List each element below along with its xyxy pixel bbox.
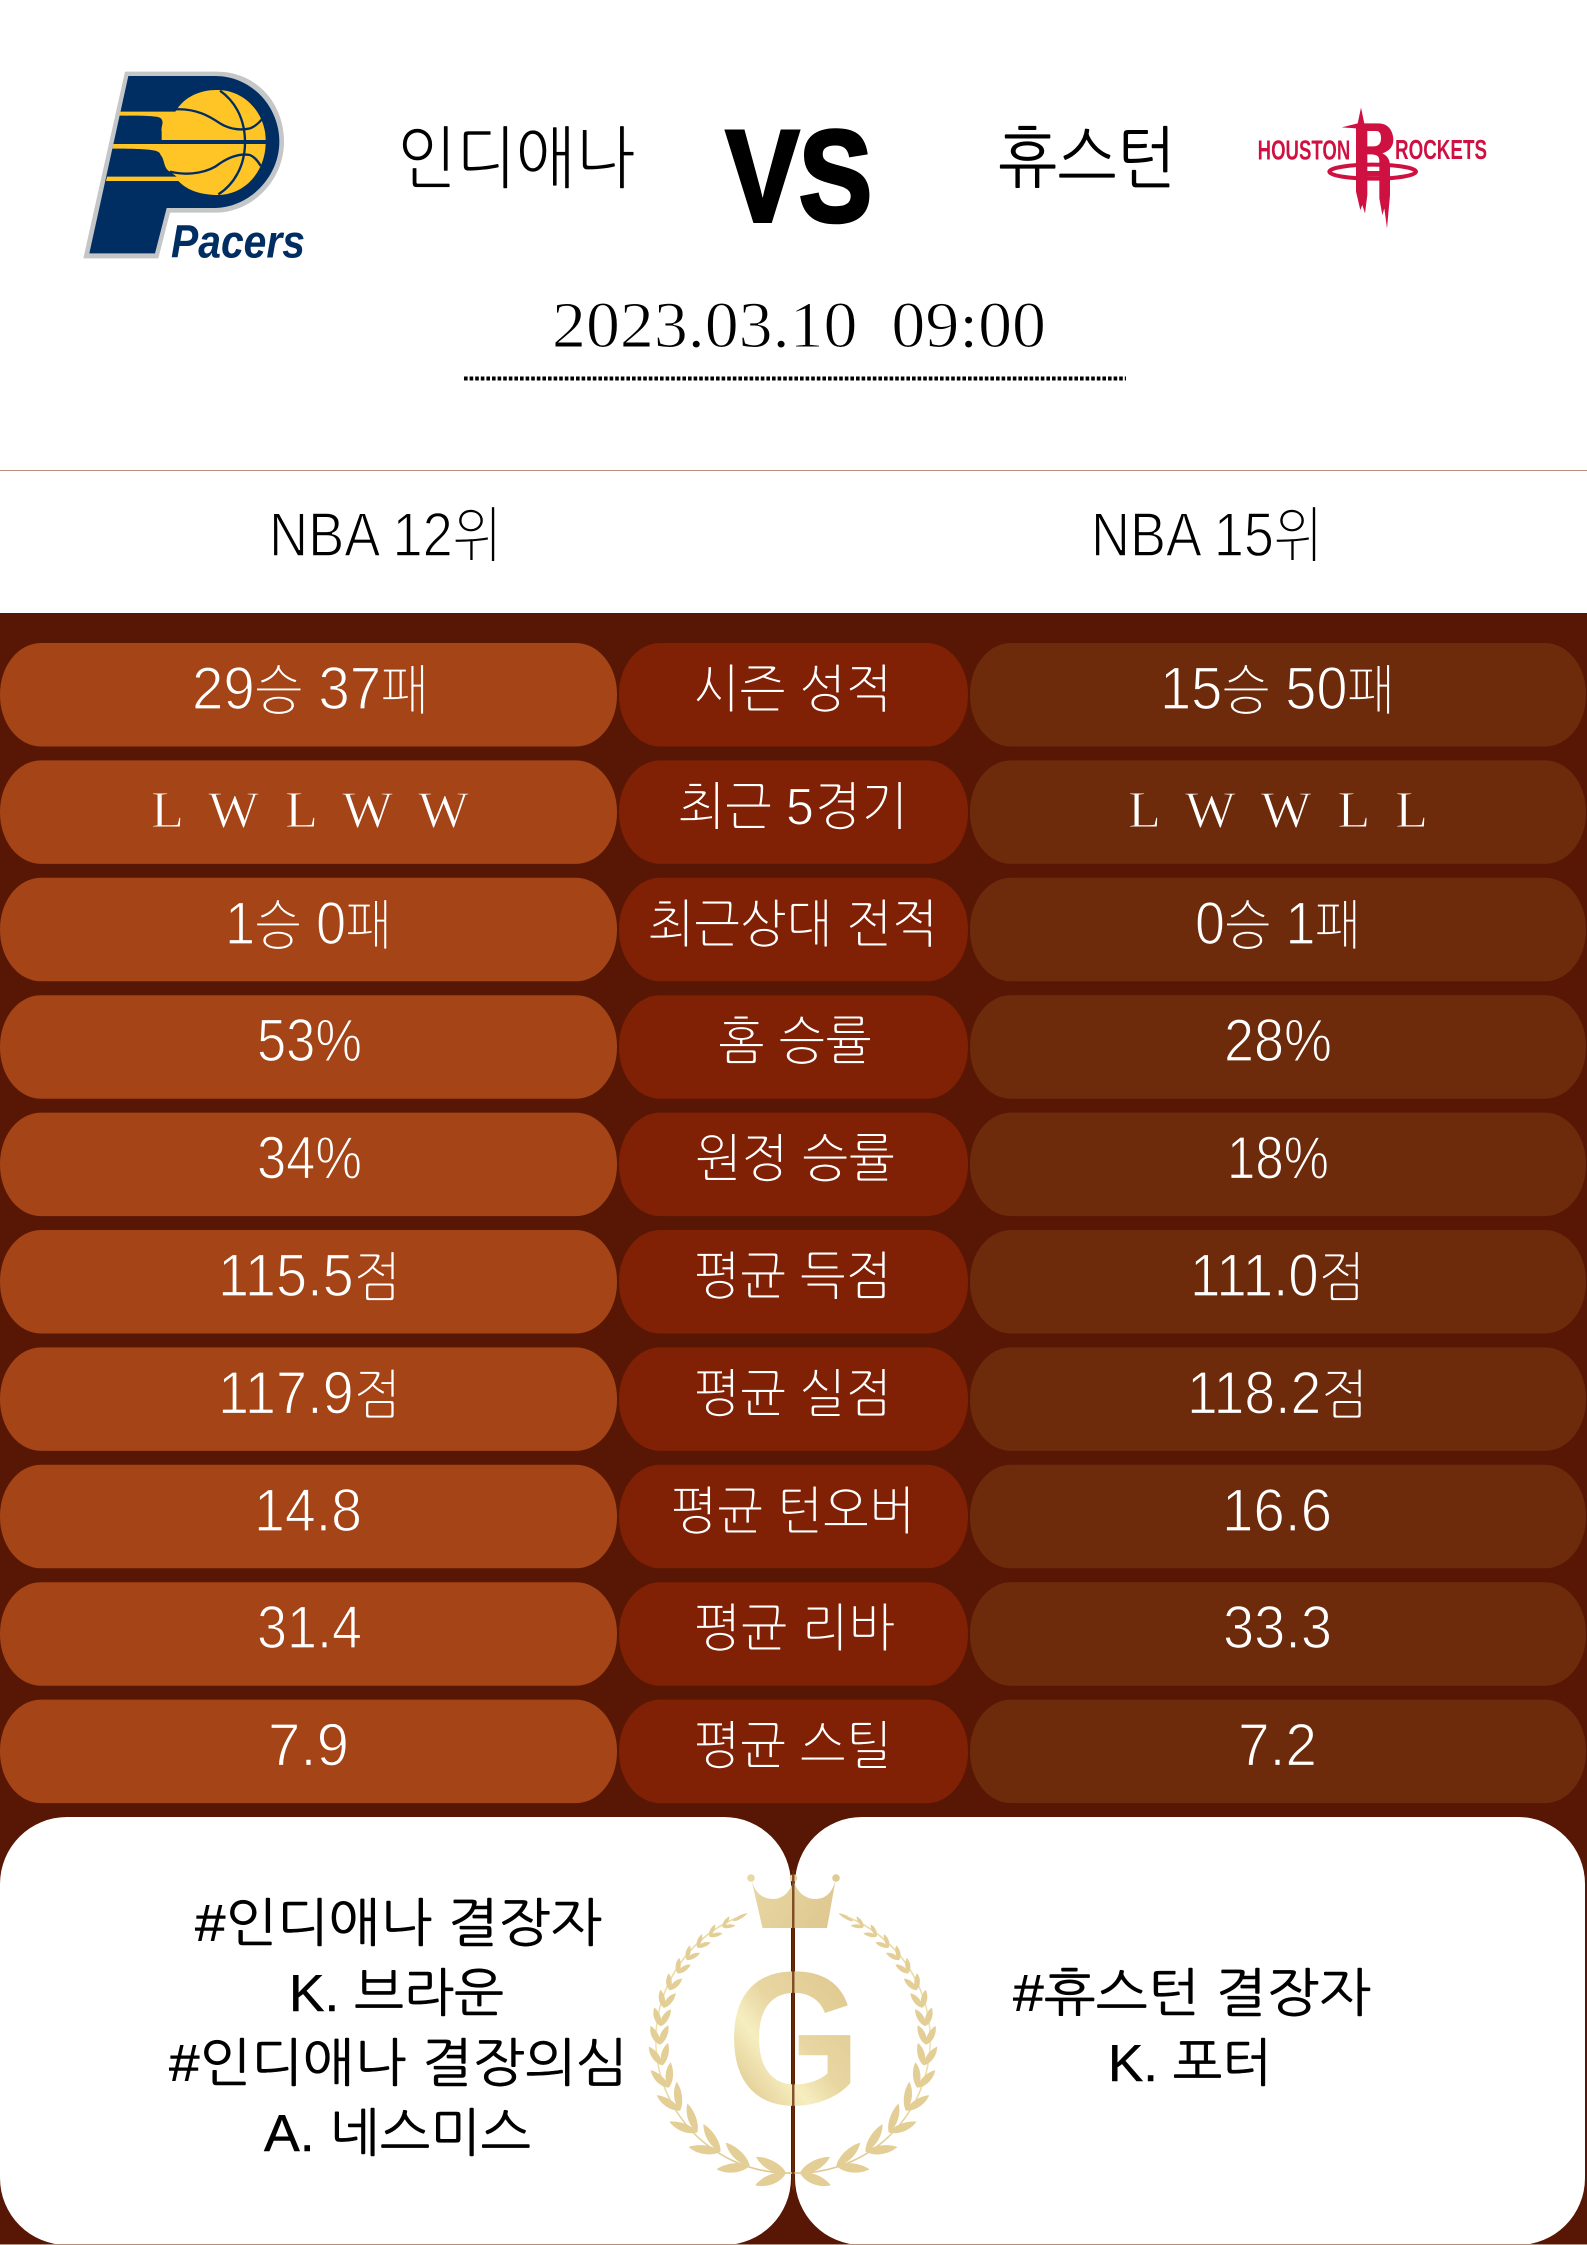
heading: VS: VS — [726, 103, 872, 249]
row: average points scored: 111.0점 — [1190, 1242, 1365, 1309]
row: last five games: 최근 5경기 — [678, 778, 908, 836]
text: Houston absent heading: #휴스턴 결장자 — [1013, 1965, 1371, 2023]
panel: dark background — [0, 613, 1587, 2245]
row: average steals: 7.9 — [268, 1712, 349, 1779]
row: last five games — [0, 760, 1586, 864]
heading: Indiana: 인디애나 — [397, 121, 635, 197]
date and time: 2023.03.10 09:00 — [552, 289, 1046, 362]
row: home win rate: 28% — [1224, 1007, 1332, 1074]
row: away win rate — [0, 1113, 1586, 1216]
row: average points allowed — [0, 1347, 1586, 1451]
row: away win rate: 34% — [257, 1125, 362, 1192]
league rank: Houston: NBA 15위 — [1091, 501, 1323, 570]
text: K. Porter: K. 포터 — [1108, 2035, 1272, 2093]
row: average points scored: 평균 득점 — [694, 1248, 892, 1306]
icon: Houston Rockets logo: HOUSTON — [1258, 135, 1350, 166]
panel: stats table — [0, 643, 1586, 1803]
crown — [747, 1874, 840, 1928]
row: home win rate: 53% — [257, 1007, 362, 1074]
row: average rebounds: 31.4 — [257, 1594, 362, 1661]
row: head to head: 0승 1패 — [1195, 890, 1361, 957]
text: K. Brown: K. 브라운 — [289, 1965, 504, 2023]
row: head to head: 최근상대 전적 — [648, 896, 938, 954]
row: average points scored: 115.5점 — [218, 1242, 401, 1309]
row: average turnovers: 평균 턴오버 — [671, 1483, 915, 1541]
panel: Houston absences — [795, 1817, 1585, 2245]
row: away win rate: 원정 승률 — [695, 1131, 895, 1189]
row: average turnovers — [0, 1465, 1586, 1568]
letter G: G — [727, 1933, 861, 2145]
laurel wreath — [646, 1912, 940, 2190]
row: average turnovers: 16.6 — [1222, 1477, 1332, 1544]
row: home win rate: 홈 승률 — [718, 1013, 872, 1071]
icon: Indiana Pacers logo — [83, 72, 305, 267]
row: season record: 15승 50패 — [1160, 655, 1395, 722]
row: away win rate: 18% — [1227, 1125, 1329, 1192]
row: average points allowed: 117.9점 — [218, 1359, 401, 1426]
row: average steals: 평균 스틸 — [694, 1718, 892, 1776]
heading: Houston: 휴스턴 — [998, 121, 1176, 197]
row: head to head: 1승 0패 — [225, 890, 392, 957]
dotted underline — [464, 376, 1126, 380]
row: season record — [0, 643, 1586, 746]
row: average points scored — [0, 1230, 1586, 1334]
text: Indiana absent heading: #인디애나 결장자 — [195, 1895, 602, 1953]
row: last five games: L W L W W — [151, 782, 469, 839]
row: head to head — [0, 878, 1586, 981]
row: average points allowed: 평균 실점 — [694, 1365, 892, 1423]
header: team names and date — [83, 72, 1487, 379]
row: season record: 29승 37패 — [192, 655, 429, 722]
icon: Houston Rockets logo — [1258, 108, 1487, 228]
text: Indiana doubtful heading: #인디애나 결장의심 — [169, 2035, 628, 2093]
row: average rebounds — [0, 1582, 1586, 1686]
row: average rebounds: 평균 리바 — [694, 1600, 895, 1658]
row: average steals: 7.2 — [1238, 1712, 1317, 1779]
row: average turnovers: 14.8 — [254, 1477, 362, 1544]
row: last five games: L W W L L — [1128, 782, 1428, 839]
row: season record: 시즌 성적 — [693, 661, 892, 719]
row: average steals — [0, 1700, 1586, 1803]
icon: gold crown and laurel G emblem — [646, 1874, 940, 2190]
league rank: Indiana: NBA 12위 — [269, 501, 502, 570]
row: average points allowed: 118.2점 — [1187, 1359, 1368, 1426]
panel: Indiana absences — [0, 1817, 791, 2245]
row: home win rate — [0, 995, 1586, 1099]
row: average rebounds: 33.3 — [1223, 1594, 1332, 1661]
text: A. Nesmith: A. 네스미스 — [264, 2105, 531, 2163]
